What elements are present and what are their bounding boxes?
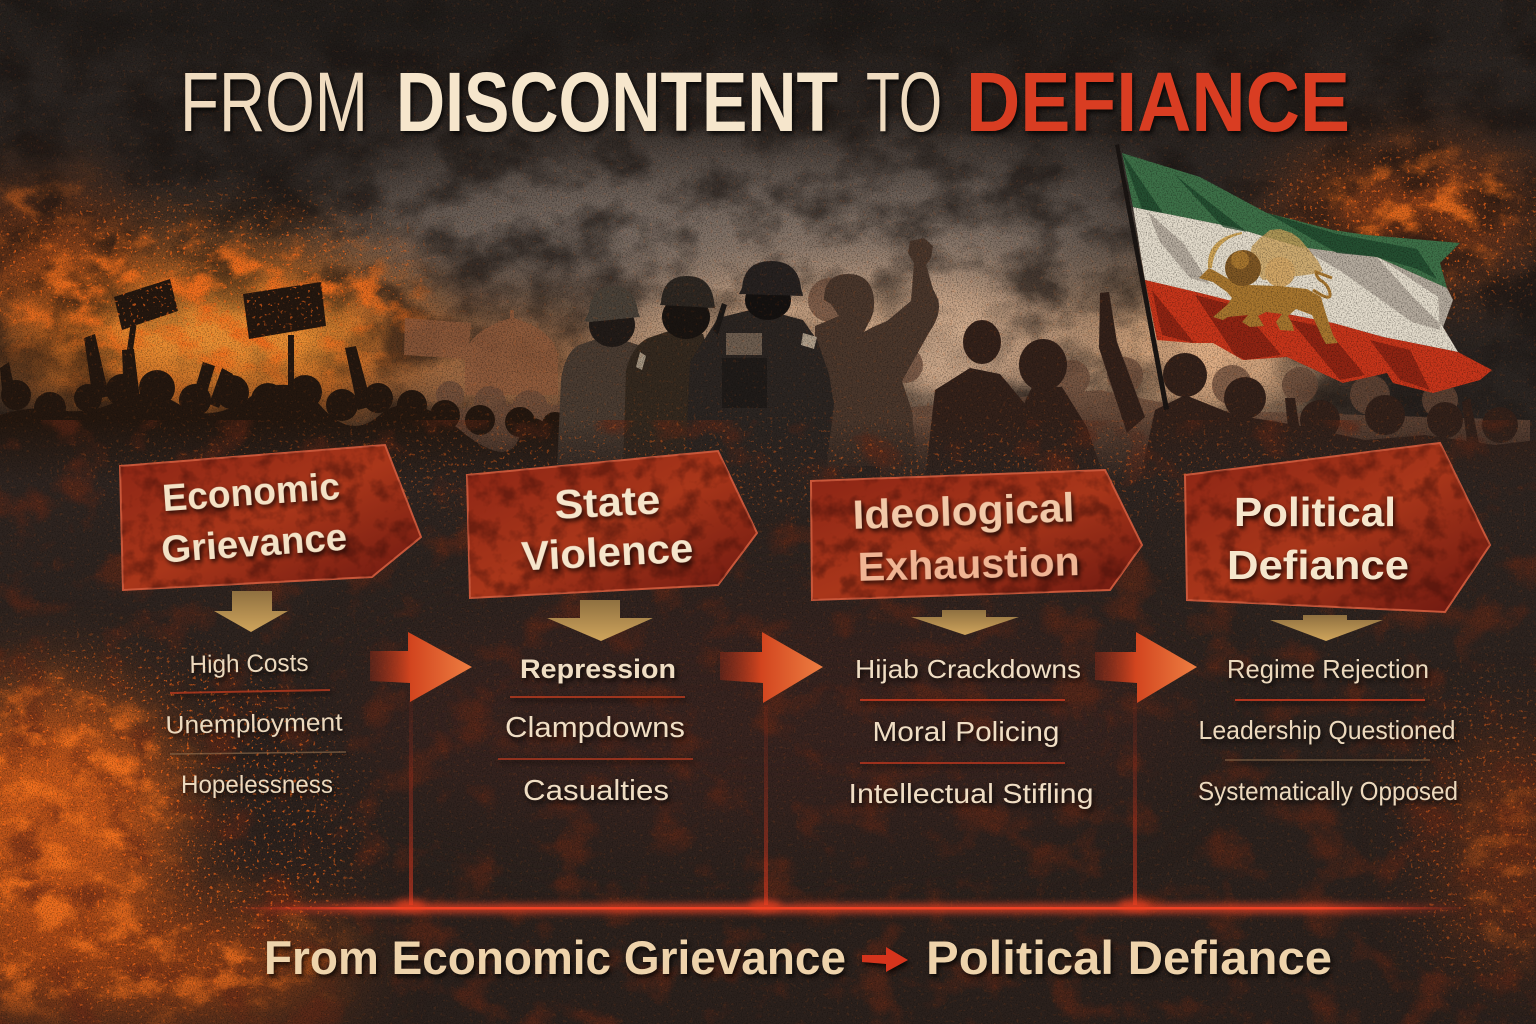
bottom summary: From Economic Grievance (264, 931, 846, 984)
body (1199, 268, 1338, 344)
arrow: side 1 (370, 632, 472, 702)
mane (1225, 250, 1261, 286)
list: state violence (498, 654, 693, 807)
white band (1133, 207, 1458, 352)
panel: ideological exhaustion: Ideological (852, 484, 1075, 538)
list: ideological exhaustion (848, 654, 1094, 809)
list: economic grievance (165, 649, 346, 799)
panel: ideological exhaustion: Exhaustion (857, 538, 1080, 590)
bottom summary (264, 931, 1332, 984)
raised fist protester (815, 238, 939, 466)
soldier centre (636, 261, 834, 470)
list: economic grievance: Unemployment (165, 708, 343, 740)
flag pole (1115, 144, 1169, 410)
timeline connectors (230, 700, 1470, 912)
flag: lion and sun tricolour (1122, 153, 1492, 393)
background: smoke and fire (0, 0, 1536, 444)
soldier middle (623, 276, 723, 470)
panel: political defiance: Political (1234, 489, 1396, 535)
man in suit (963, 320, 1001, 364)
title: DISCONTENT (396, 55, 838, 149)
icon: down arrow 2 (547, 600, 653, 641)
list: political defiance (1198, 654, 1458, 806)
icon: down arrow 1 (214, 591, 288, 632)
list: ideological exhaustion: Intellectual Stifling (848, 778, 1094, 809)
red band (1145, 280, 1492, 393)
title (180, 55, 1350, 149)
panel: economic grievance (120, 445, 421, 590)
protester crowd left (0, 279, 568, 485)
icon: down arrow 4 (1270, 615, 1383, 641)
panel: state violence: State (553, 476, 661, 528)
protester crowd right (925, 292, 1536, 480)
riot police group (557, 261, 834, 470)
list: state violence: Casualties (523, 775, 669, 807)
list: ideological exhaustion: Moral Policing (872, 716, 1060, 747)
placards (114, 279, 178, 330)
list: political defiance: Regime Rejection (1227, 654, 1429, 684)
list: ideological exhaustion: Hijab Crackdowns (855, 654, 1081, 684)
title: DEFIANCE (966, 55, 1350, 149)
list: state violence: Clampdowns (505, 712, 685, 744)
list: state violence: Repression (520, 654, 676, 684)
panel: ideological exhaustion (811, 470, 1142, 600)
crowd silhouettes: background layer (430, 278, 1530, 480)
bottom summary: Political Defiance (926, 931, 1332, 984)
sun (1248, 229, 1323, 280)
tail (1313, 272, 1332, 297)
list: economic grievance: Hopelessness (181, 771, 333, 799)
list: political defiance: Leadership Questioned (1198, 715, 1456, 745)
upper flames (0, 128, 1536, 410)
list: economic grievance: High Costs (189, 649, 309, 679)
panel: state violence: Violence (520, 525, 694, 579)
arrow: side 3 (1095, 632, 1197, 703)
arrow: side 2 (720, 632, 823, 703)
list: political defiance: Systematically Opposed (1198, 776, 1458, 806)
panel: state violence (467, 451, 757, 598)
lion emblem (1199, 229, 1338, 344)
green band (1122, 153, 1460, 288)
panel: economic grievance: Economic (161, 466, 341, 520)
panel: political defiance: Defiance (1227, 542, 1409, 588)
title: FROM (180, 55, 368, 149)
cover fading lower crowd into dark ground (0, 420, 1536, 1024)
icon: down arrow 3 (911, 610, 1019, 635)
panel: political defiance (1185, 443, 1490, 612)
panel: economic grievance: Grievance (160, 517, 348, 571)
soldier left (557, 286, 666, 470)
title: TO (866, 55, 942, 149)
icon: summary arrow (862, 947, 908, 972)
sword (1208, 232, 1242, 268)
woman with long hair (1019, 339, 1067, 391)
distant building silhouette (404, 310, 558, 395)
